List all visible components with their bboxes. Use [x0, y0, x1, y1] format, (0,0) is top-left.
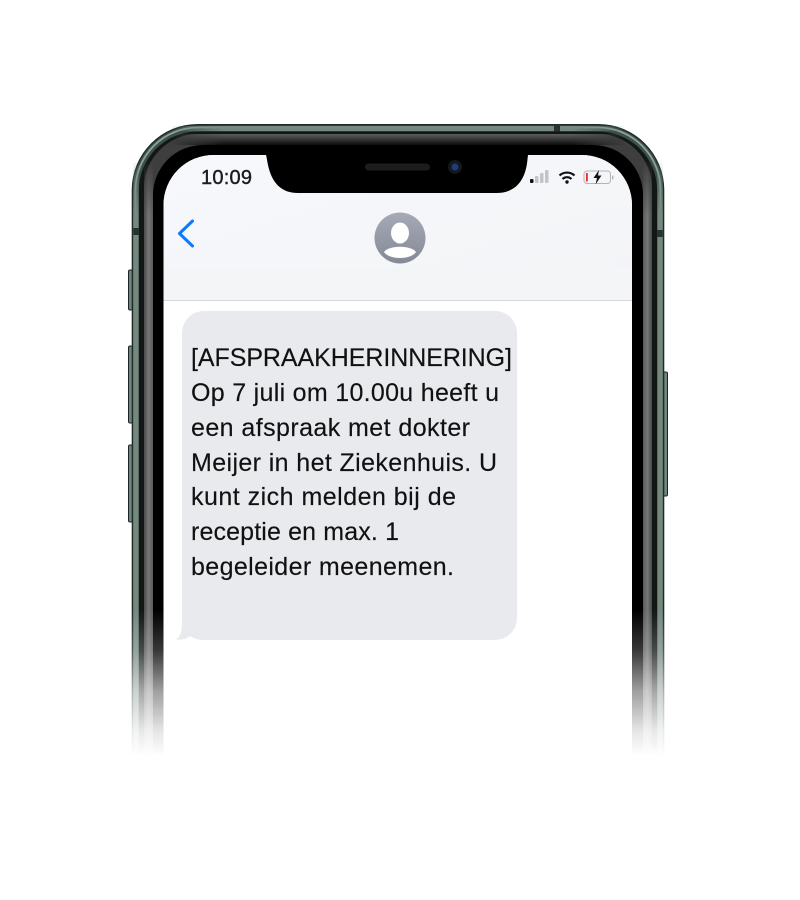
message text: [AFSPRAAKHERINNERING]: [191, 344, 512, 372]
message header bar: [164, 155, 632, 301]
speaker: [365, 164, 430, 170]
message text: een afspraak met dokter: [191, 414, 470, 442]
message bubble: [176, 311, 517, 640]
battery icon: [584, 170, 614, 184]
contact avatar: [374, 212, 426, 264]
message text: receptie en max. 1: [191, 518, 399, 546]
wifi icon: [560, 173, 574, 183]
notch: [262, 150, 532, 193]
bottom fade right: [632, 610, 680, 756]
message text: kunt zich melden bij de: [191, 483, 456, 511]
infographic: phone showing SMS reminder: [128, 124, 668, 748]
status time: 10:09: [201, 167, 252, 189]
camera: [448, 160, 462, 174]
signal icon: [530, 170, 548, 183]
message text: Op 7 juli om 10.00u heeft u: [191, 379, 499, 407]
fade cover: [120, 755, 680, 900]
phone frame: [132, 124, 664, 748]
back chevron: [180, 221, 192, 246]
message text: begeleider meenemen.: [191, 553, 454, 581]
message text: [191, 344, 512, 581]
screen: [164, 155, 632, 755]
message text: Meijer in het Ziekenhuis. U: [191, 449, 497, 477]
side buttons: [128, 270, 668, 522]
phone: [128, 124, 668, 748]
bottom fade left: [120, 610, 164, 756]
